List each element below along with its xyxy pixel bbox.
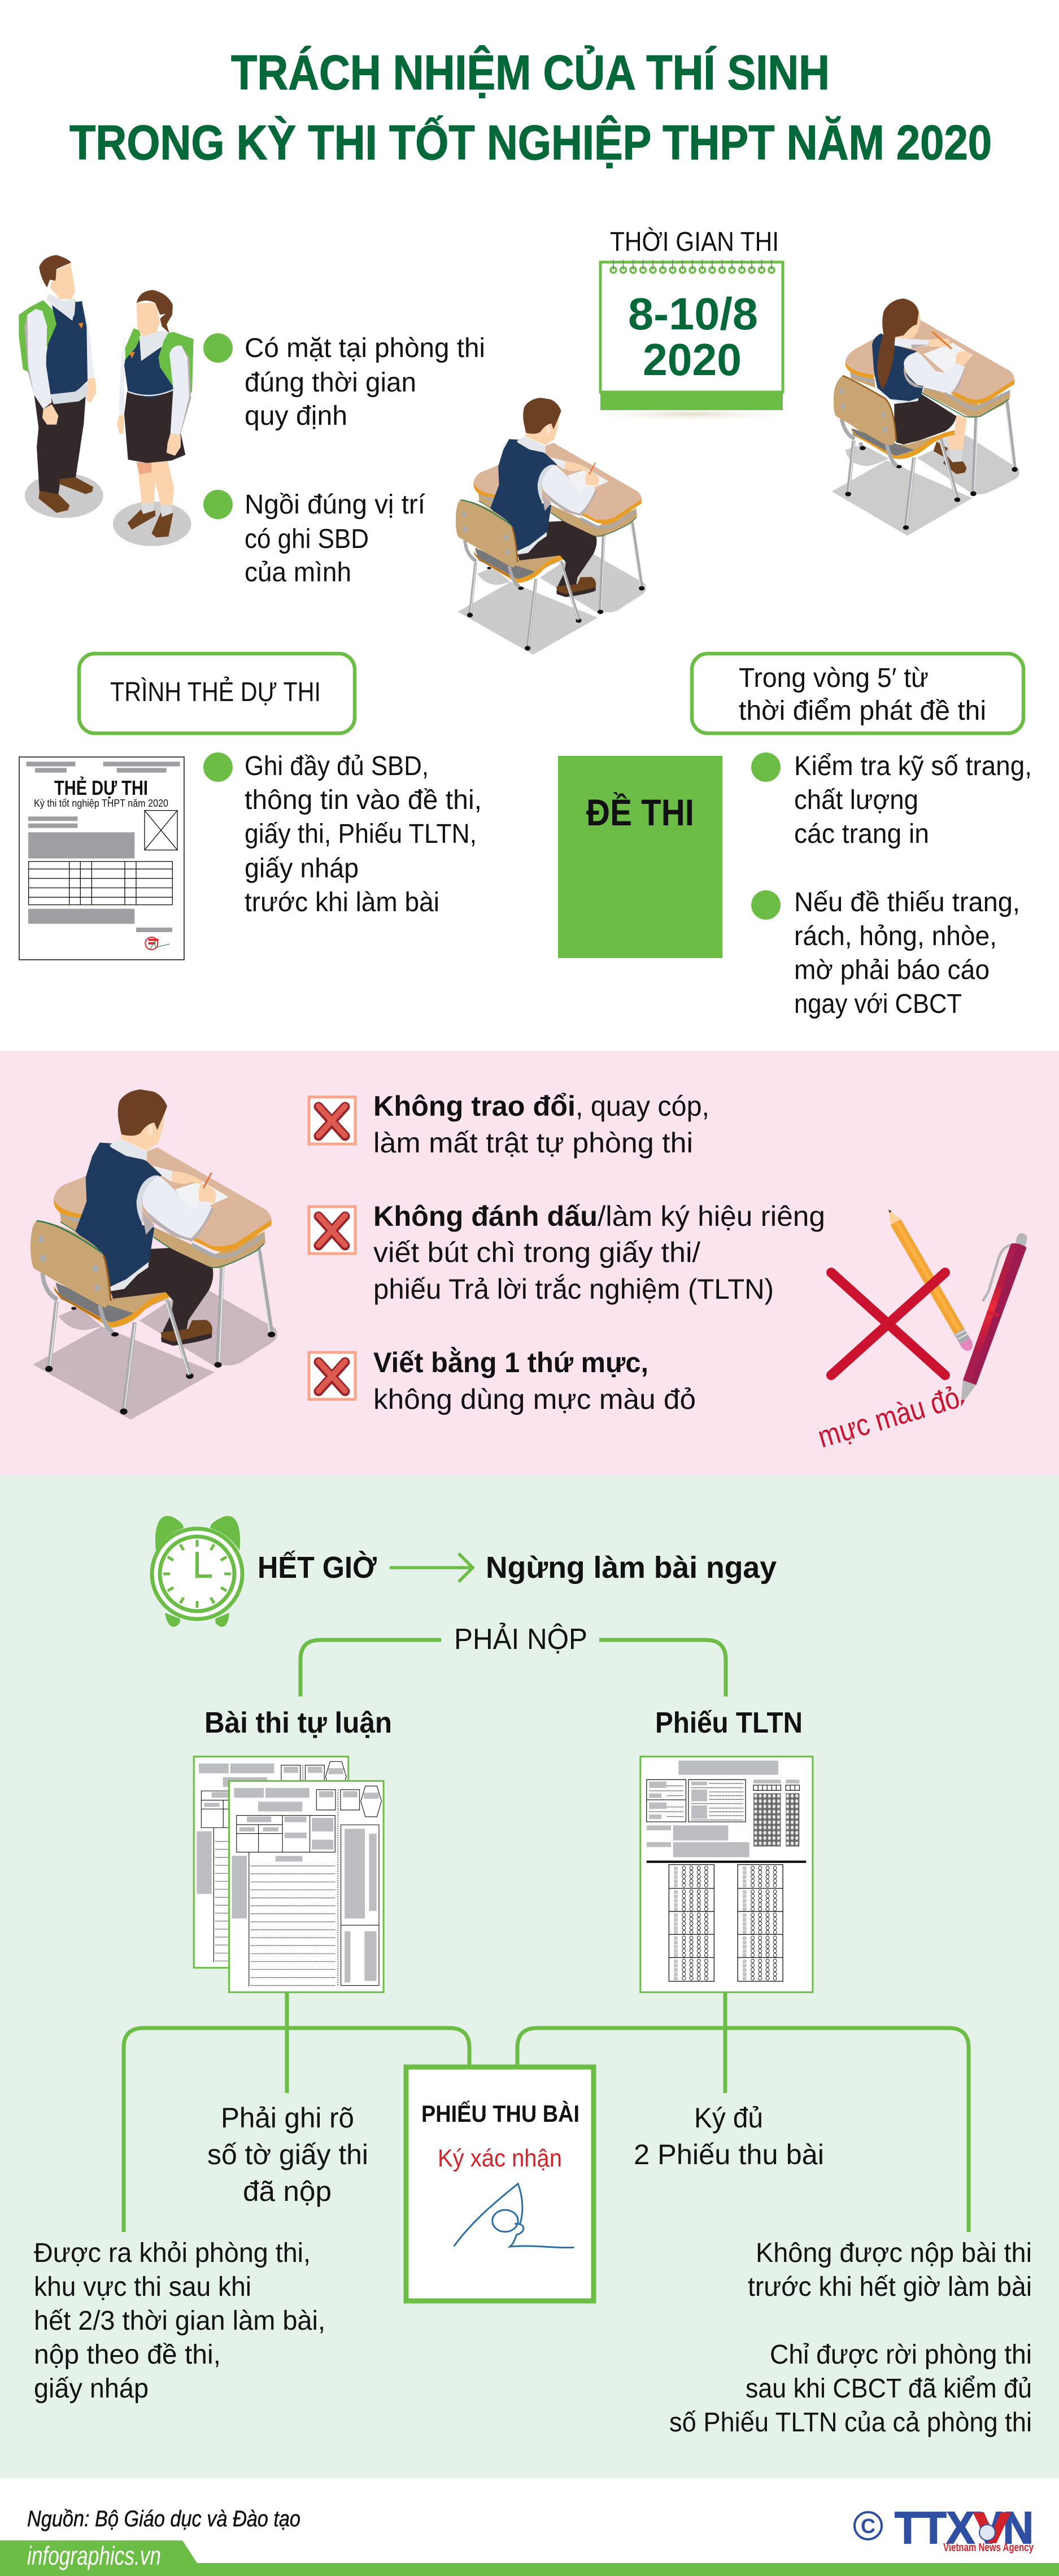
bullet text: fill in details: Ghi đầy đủ SBD,	[245, 751, 429, 781]
rule: no marks: phiếu Trả lời trắc nghiệm (TLTN)	[373, 1273, 774, 1305]
note: leaving the room early: hết 2/3 thời gian làm bài,	[34, 2306, 325, 2336]
rule: no marks	[309, 1200, 825, 1305]
label box: present admission card	[79, 654, 355, 733]
panel: exam paper: ĐỀ THI	[586, 791, 694, 833]
bullet text: fill in details: giấy thi, Phiếu TLTN,	[245, 819, 477, 849]
note: submission and leaving rules: số Phiếu TLTN của cả phòng thi	[669, 2408, 1032, 2438]
icon: male student at exam desk	[456, 398, 646, 655]
connector lines: from submissions to notes	[124, 1992, 969, 2232]
note: record number of sheets: đã nộp	[243, 2175, 332, 2207]
note: submission and leaving rules: Chỉ được rời phòng thi	[770, 2340, 1032, 2370]
bullet list: check the exam paper: Nếu đề thiếu trang,	[794, 887, 1020, 917]
icon: student at desk on pink panel	[30, 1089, 277, 1420]
bullet text: fill in details	[203, 751, 482, 917]
bullet text: fill in details: thông tin vào đề thi,	[245, 785, 482, 815]
note: submission and leaving rules: Không được nộp bài thi	[756, 2238, 1032, 2268]
note: record number of sheets	[207, 2102, 368, 2207]
document: multiple-choice answer sheet	[640, 1756, 813, 1992]
arrow: stop working	[390, 1554, 473, 1582]
icon: female student at exam desk	[832, 298, 1019, 536]
bullet list: arrive on time and correct seat: đúng thời gian	[245, 368, 416, 398]
rule: one ink colour: Viết bằng 1 thứ mực,	[373, 1347, 648, 1378]
heading: time up: Ngừng làm bài ngay	[486, 1551, 777, 1585]
bullet list: check the exam paper: ngay với CBCT	[794, 989, 962, 1019]
rule: no talking: , quay cóp,	[576, 1090, 709, 1122]
logo: TTXVN: C	[861, 2514, 875, 2538]
note: submission and leaving rules: trước khi hết giờ làm bài	[748, 2272, 1032, 2302]
panel: collection sheet with signature: PHIẾU THU BÀI	[421, 2100, 579, 2127]
bullet list: arrive on time and correct seat	[203, 333, 485, 588]
footer band with site name	[0, 2540, 1059, 2576]
bullet list: check the exam paper: chất lượng	[794, 785, 918, 815]
rule: one ink colour	[309, 1347, 696, 1415]
note: leaving the room early	[34, 2238, 325, 2404]
panel: collection sheet with signature	[406, 2067, 594, 2301]
icon: crossed pencil and red pen	[814, 1209, 1027, 1455]
label box: within 5 minutes: thời điểm phát đề thi	[739, 696, 986, 726]
bullet list: check the exam paper: Kiểm tra kỹ số trang,	[794, 751, 1032, 781]
icon: standing female student	[113, 290, 194, 546]
section background: pink prohibitions	[0, 1051, 1059, 1476]
note: sign both sheets: Ký đủ	[694, 2102, 763, 2134]
calendar: exam dates	[579, 227, 805, 422]
bullet list: check the exam paper: rách, hỏng, nhòe,	[794, 921, 997, 951]
label box: present admission card: TRÌNH THẺ DỰ THI	[110, 676, 321, 707]
rule: no marks: /làm ký hiệu riêng	[598, 1200, 825, 1232]
logo: TTXVN: TTXVN	[895, 2503, 1034, 2553]
label box: within 5 minutes: Trong vòng 5′ từ	[739, 663, 929, 693]
note: leaving the room early: khu vực thi sau khi	[34, 2272, 251, 2302]
bullet list: arrive on time and correct seat: của mình	[245, 558, 351, 588]
note: leaving the room early: Được ra khỏi phòng thi,	[34, 2238, 311, 2268]
bullet text: fill in details: giấy nháp	[245, 854, 359, 884]
bullet text: fill in details: trước khi làm bài	[245, 887, 439, 917]
note: submission and leaving rules	[669, 2238, 1032, 2438]
note: sign both sheets: 2 Phiếu thu bài	[634, 2139, 824, 2170]
footer band with site name: infographics.vn	[27, 2541, 161, 2570]
section background: green end of exam	[0, 1476, 1059, 2478]
calendar: exam dates: 8-10/8	[628, 289, 758, 339]
note: record number of sheets: số tờ giấy thi	[207, 2139, 368, 2170]
icon: alarm clock	[152, 1516, 242, 1627]
title	[69, 46, 992, 170]
calendar: exam dates: THỜI GIAN THI	[610, 227, 779, 257]
heading: must submit with bracket	[300, 1622, 726, 1696]
rule: no talking	[309, 1090, 709, 1159]
label box: within 5 minutes	[692, 654, 1023, 733]
document: admission card	[19, 757, 184, 960]
note: sign both sheets	[634, 2102, 824, 2170]
bullet list: arrive on time and correct seat: quy định	[245, 401, 347, 431]
calendar: exam dates: 2020	[643, 334, 742, 385]
panel: exam paper	[558, 756, 722, 958]
heading: must submit with bracket: PHẢI NỘP	[454, 1622, 587, 1656]
document: admission card: THẺ DỰ THI	[54, 776, 148, 799]
note: submission and leaving rules: sau khi CBCT đã kiểm đủ	[746, 2374, 1032, 2404]
bullet list: check the exam paper	[751, 751, 1032, 1019]
bullet list: arrive on time and correct seat: Có mặt tại phòng thi	[245, 333, 485, 363]
label: answer sheet: Phiếu TLTN	[655, 1707, 803, 1739]
rule: no talking: làm mất trật tự phòng thi	[373, 1127, 693, 1159]
panel: collection sheet with signature: Ký xác nhận	[438, 2144, 562, 2172]
source line: Nguồn: Bộ Giáo dục và Đào tạo	[27, 2507, 300, 2531]
note: leaving the room early: nộp theo đề thi,	[34, 2340, 221, 2370]
note: leaving the room early: giấy nháp	[34, 2374, 149, 2404]
bullet list: check the exam paper: các trang in	[794, 819, 929, 849]
title: TRÁCH NHIỆM CỦA THÍ SINH	[231, 46, 830, 100]
bullet list: arrive on time and correct seat: có ghi SBD	[245, 524, 369, 554]
label: essay paper: Bài thi tự luận	[204, 1707, 392, 1739]
rule: one ink colour: không dùng mực màu đỏ	[373, 1383, 696, 1415]
bullet list: check the exam paper: mờ phải báo cáo	[794, 955, 990, 985]
document: essay answer sheets	[194, 1756, 383, 1992]
icon: crossed pencil and red pen: mực màu đỏ	[814, 1381, 964, 1455]
rule: no marks: Không đánh dấu	[373, 1200, 598, 1232]
heading: time up	[258, 1551, 777, 1585]
document: admission card: Kỳ thi tốt nghiệp THPT năm 2020	[34, 798, 168, 809]
bullet list: arrive on time and correct seat: Ngồi đúng vị trí	[245, 490, 426, 520]
heading: time up: HẾT GIỜ	[258, 1551, 377, 1585]
rule: no talking: Không trao đổi	[373, 1090, 576, 1122]
icon: standing male student	[19, 255, 103, 518]
rule: no marks: viết bút chì trong giấy thi/	[373, 1237, 700, 1268]
note: record number of sheets: Phải ghi rõ	[221, 2102, 354, 2134]
